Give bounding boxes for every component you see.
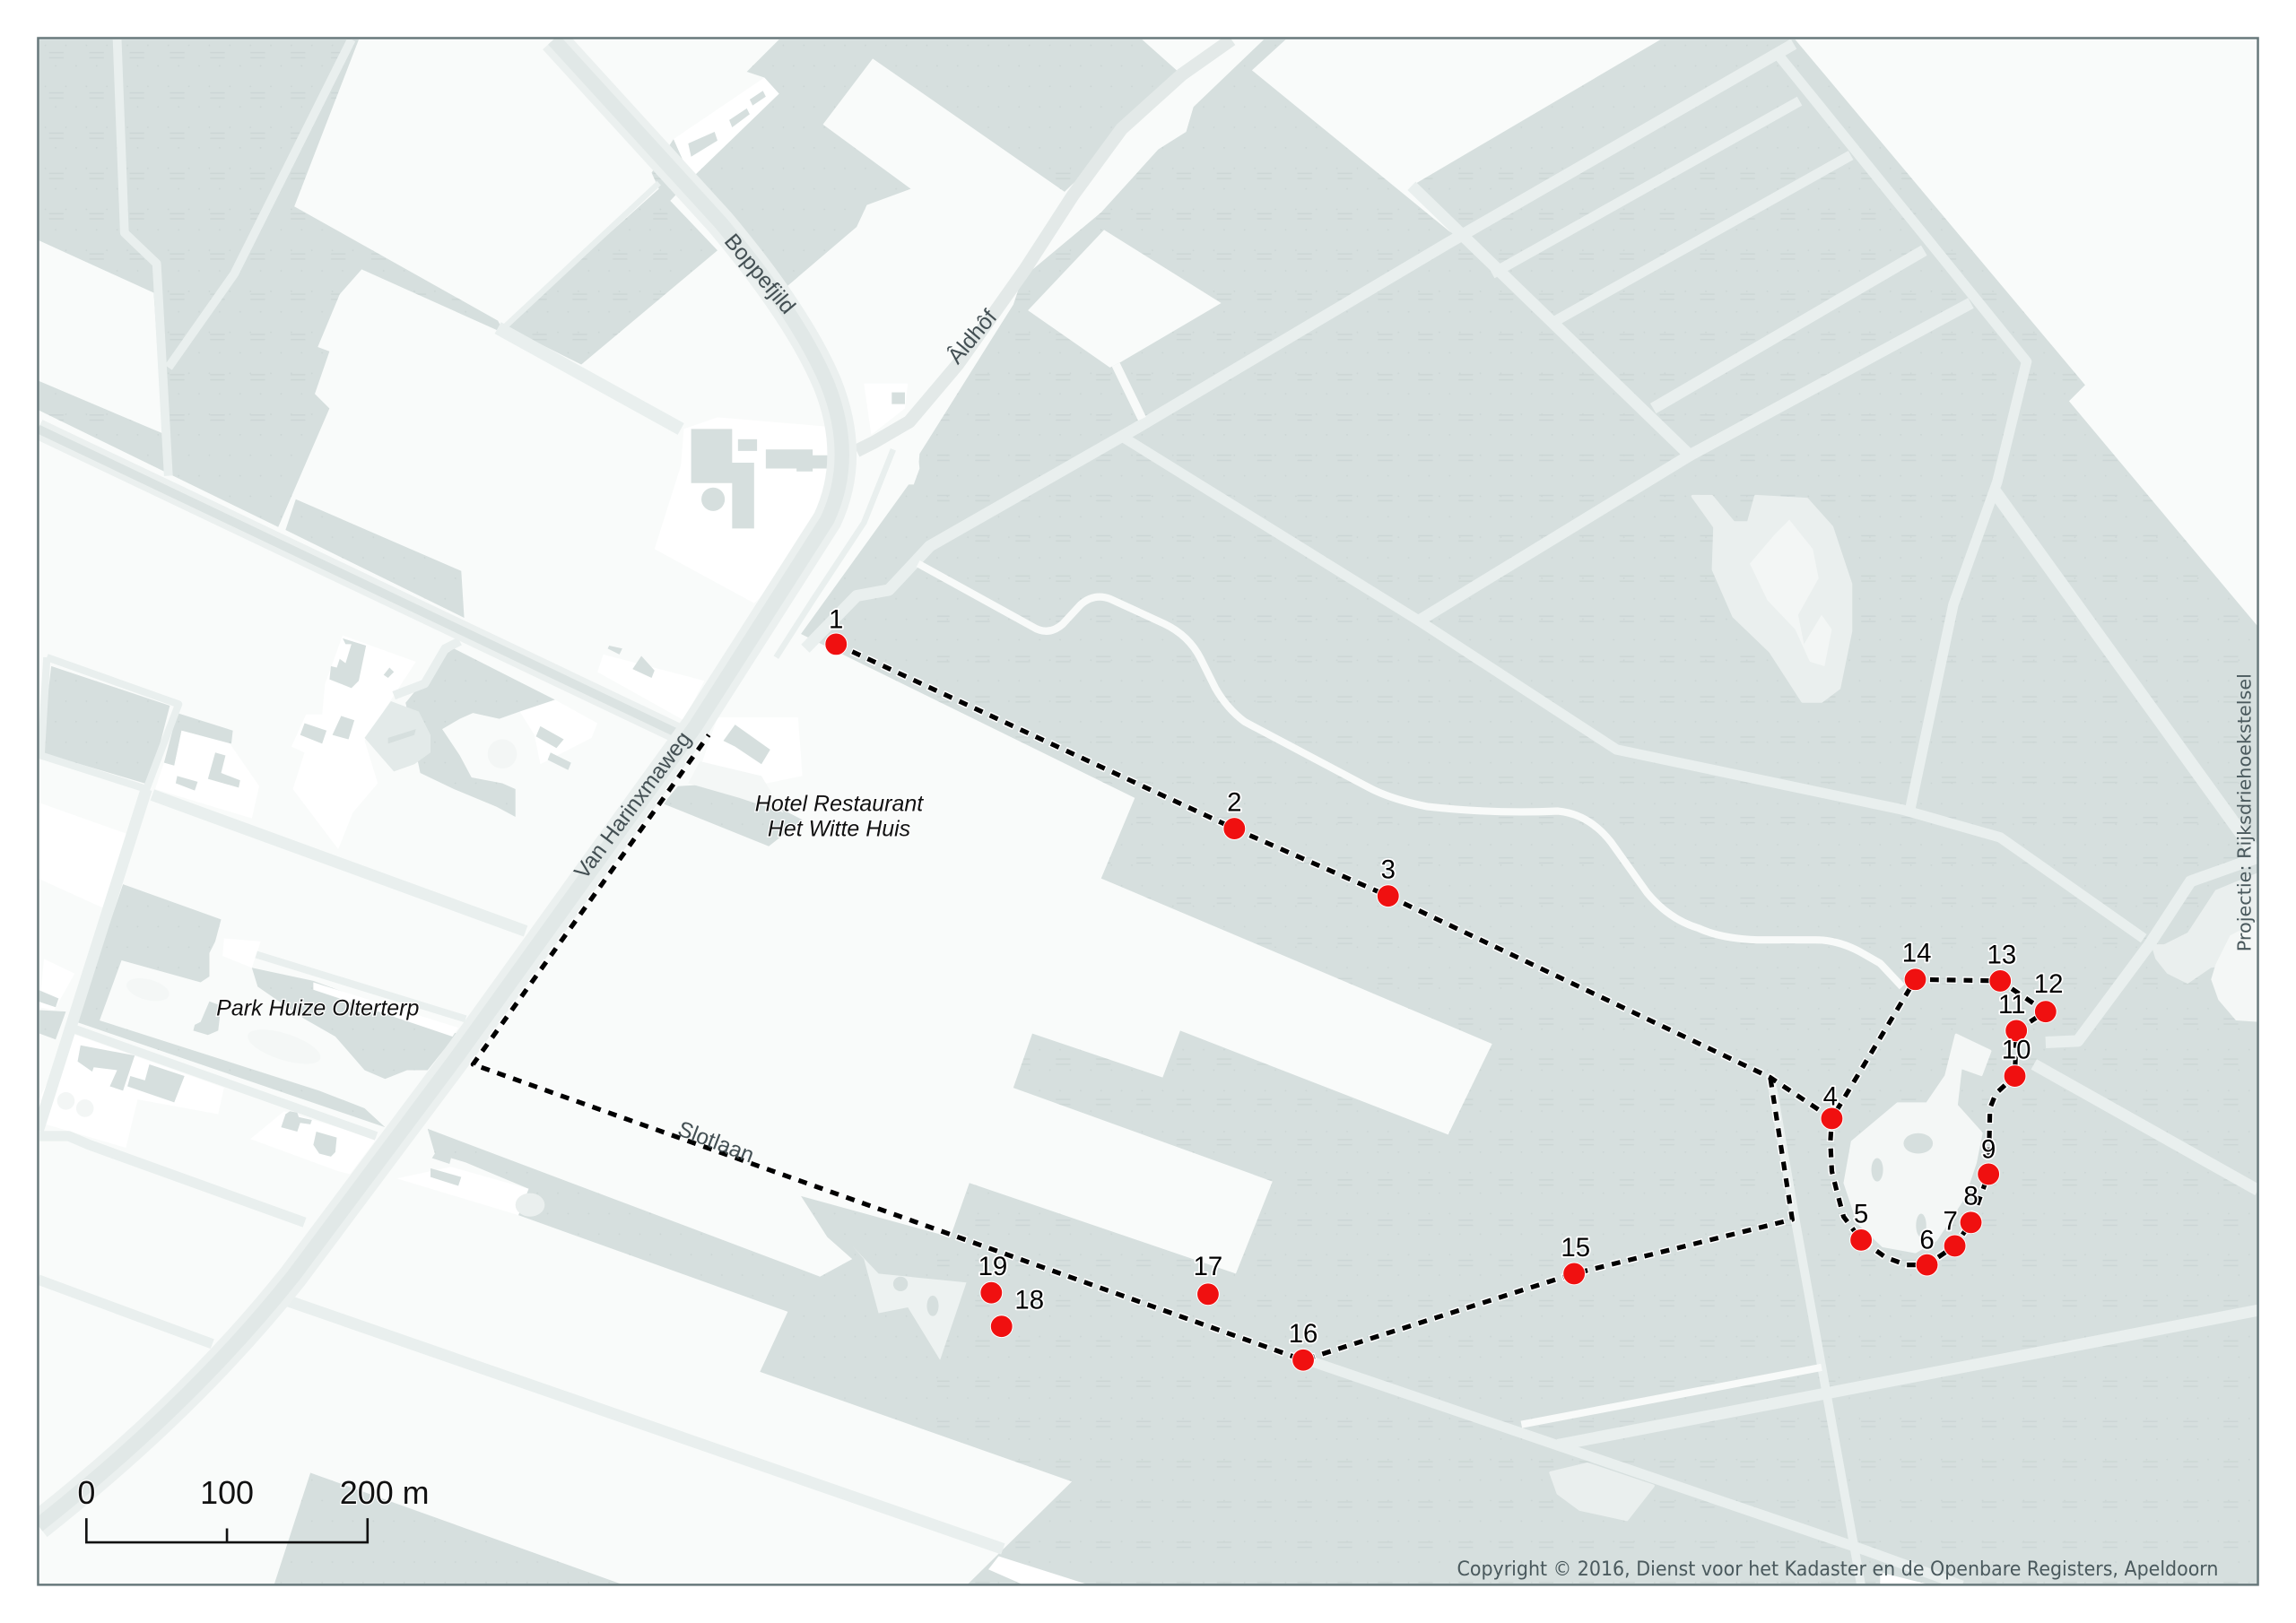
cycle path band beside Aldhof — [909, 41, 1262, 484]
scale bar: 0 — [77, 1474, 95, 1511]
place labels — [216, 792, 924, 1020]
route point numbers: 15 — [1561, 1233, 1590, 1263]
route points — [825, 633, 2057, 1371]
route point numbers: 9 — [1981, 1134, 1996, 1164]
road names: Van Harinxmaweg — [570, 727, 696, 884]
road names: Boppefjild — [719, 230, 800, 319]
route point numbers: 4 — [1823, 1082, 1838, 1112]
place labels: Park Huize Olterterp — [216, 995, 419, 1020]
route point numbers: 2 — [1227, 788, 1241, 818]
route point numbers: 11 — [1998, 990, 2026, 1020]
route point numbers: 10 — [2002, 1035, 2031, 1064]
road names: Âldhôf — [944, 306, 1002, 369]
open fields over forest — [38, 39, 1660, 433]
route point numbers: 1 — [829, 604, 843, 634]
place labels: Hotel Restaurant — [755, 792, 924, 817]
route point numbers: 3 — [1381, 855, 1396, 885]
buildings — [38, 91, 905, 1185]
road: Aldhof — [857, 39, 1231, 451]
route: dashed walking line — [473, 644, 2046, 1360]
bright paths — [918, 365, 1902, 1425]
route point numbers: 12 — [2034, 969, 2063, 999]
route point numbers — [829, 604, 2063, 1349]
route point numbers: 14 — [1902, 939, 1931, 968]
diagonal road — [38, 429, 681, 735]
copyright note: Copyright © 2016, Dienst voor het Kadaster en de Openbare Registers, Apeldoorn — [1457, 1558, 2218, 1581]
road names — [570, 230, 1002, 1168]
ponds — [57, 496, 2258, 1520]
road names: Slotlaan — [674, 1117, 757, 1168]
route point numbers: 19 — [978, 1252, 1007, 1281]
route point numbers: 16 — [1289, 1319, 1318, 1349]
route point numbers: 7 — [1944, 1206, 1958, 1236]
projection note: Projectie: Rijksdriehoekstelsel — [2233, 673, 2255, 951]
scale bar: 200 m — [340, 1474, 430, 1511]
route point numbers: 6 — [1919, 1226, 1935, 1255]
route point numbers: 5 — [1854, 1199, 1868, 1228]
route point numbers: 8 — [1963, 1182, 1979, 1211]
scale bar — [77, 1474, 430, 1542]
white parcels — [38, 78, 1933, 1585]
main road — [38, 39, 842, 1525]
route point numbers: 17 — [1194, 1252, 1222, 1281]
route point numbers: 13 — [1987, 940, 2016, 969]
scale bar: 100 — [200, 1474, 254, 1511]
place labels: Het Witte Huis — [768, 816, 910, 841]
route point numbers: 18 — [1014, 1286, 1044, 1315]
